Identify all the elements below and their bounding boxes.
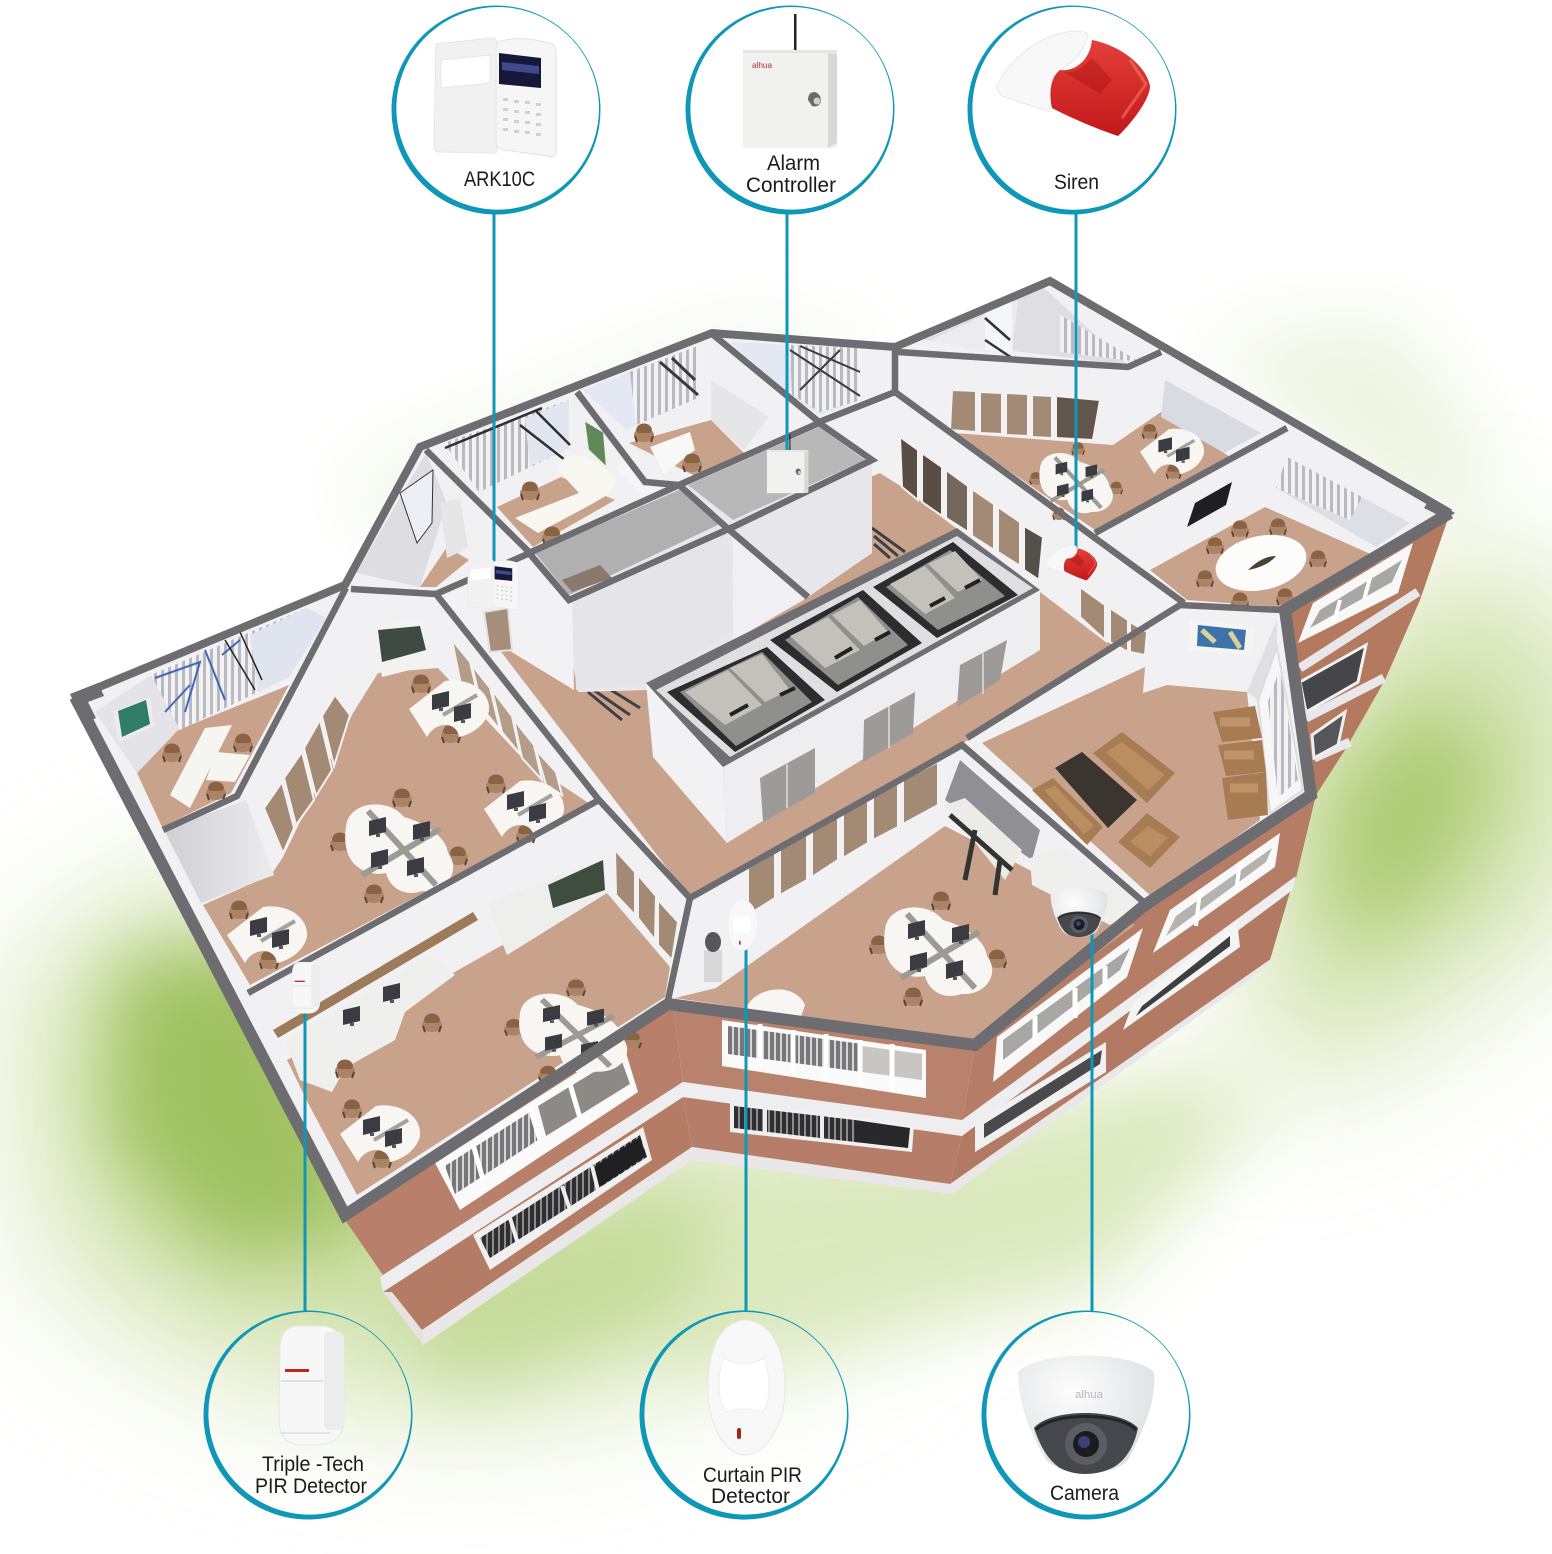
wall picture: reception [584,420,607,468]
device on plan: siren [1046,545,1097,581]
outer wall top: rear rim [75,281,1450,697]
icon: dome camera [1018,1356,1154,1474]
label: Curtain PIR Detector: Curtain PIR [703,1464,802,1487]
desk: lower left office front [340,1100,420,1168]
windows: front upper [722,1020,926,1098]
plotter equipment [945,798,1145,925]
roof: miniature floor 1 [667,647,825,752]
shade: left room back wall [95,675,180,773]
windows: front-right lower [975,1042,1106,1152]
callout: siren [968,5,1176,214]
icon: siren [996,31,1150,136]
building exterior facade [343,513,1450,1345]
blind: reception room [444,400,570,492]
shade: lounge side wall [1247,620,1277,700]
facade: right brick wall [1285,513,1450,795]
facade: white base band [422,958,1272,1345]
background: blurred lawn around the building [20,320,1552,1400]
facade: corner edge [383,1292,423,1345]
facade: lower front-left brick [383,1097,692,1330]
shelves: lower left office wall [273,912,478,1038]
windows: front-right far lower [1123,920,1240,1030]
block: roof rim [646,528,1040,767]
workstation cluster: lower centre office [869,892,1007,1006]
block: left wall [646,683,727,843]
device on plan: controller [767,434,808,493]
workstation cluster: open office [330,788,468,903]
windows: blinds on back walls [151,300,1410,813]
icon: ARK10C keypad [434,38,556,156]
connector: siren [1074,214,1078,548]
device on plan: camera [1051,887,1108,937]
device on plan: curtain detector [728,900,757,951]
stairs: right of core [872,528,905,558]
floor: reception room [497,477,615,547]
device on plan: keypad [467,560,519,610]
partition: open office right wall [452,640,562,795]
label: Alarm Controller: Controller [746,174,836,197]
label: Siren: Siren [1054,171,1099,194]
outer wall corner: right [1424,498,1455,530]
callout: ARK10C [392,5,600,214]
desk: open office lower [227,900,307,969]
block: roof inner [656,536,1033,757]
partition: upper corridor [900,437,1043,580]
furniture [113,380,1327,1168]
file room furniture [634,380,769,474]
ring: triple-tech PIR detector [204,1310,412,1520]
central roof block with miniature floors [646,528,1040,843]
floor: lower centre office [675,826,1135,1042]
desk: open office right [484,774,564,843]
floor plan: interior base [75,281,1450,1215]
label: Triple -Tech PIR Detector: PIR Detector [255,1475,367,1498]
desks: lower left office workbench [285,955,455,1092]
floor: central corridor [492,473,1150,898]
door: block left [760,748,815,822]
core: middle panel [733,533,804,640]
brand mark on controller: alhua [752,61,773,70]
glazed partitions along corridors [264,390,1147,960]
blind: meeting room [1276,457,1410,547]
floors: tan flooring in each room [137,412,1384,1195]
lounge sofas [1032,706,1268,868]
windows: front-left lower [473,1127,652,1270]
door seams [787,653,983,808]
windows: front-right upper [993,928,1143,1082]
cabinets: lower left office [487,860,607,955]
windows: front-right far upper [1153,833,1280,953]
desk: upper right office [1140,424,1204,479]
connector: camera [1090,930,1094,1312]
device on plan: triple-tech detector [292,962,320,1013]
floor: file room [629,420,744,477]
blind: stair room [730,342,861,415]
facade: upper front brick [673,1005,975,1122]
door: corridor left [484,608,512,652]
callout: curtain PIR detector [639,1310,849,1520]
partition: upper office glass [950,390,1100,440]
window: narrow left room [400,470,433,543]
wall-mounted screen [1187,482,1232,527]
block: front wall [723,590,1040,843]
label: Camera: Camera [1050,1482,1119,1505]
core: textured right room [688,427,865,520]
core: textured left room [535,490,722,595]
core: left pillar wall [436,553,574,690]
left room table and chairs [162,725,253,808]
windows: front-left upper [435,1043,638,1210]
windows: front lower [730,1102,914,1152]
callout: triple-tech PIR detector [204,1310,412,1520]
roof: miniature floor 2 [770,590,922,692]
outer wall top: front rim [75,513,1450,1215]
wall picture: lounge [1188,620,1254,655]
brand mark on camera: alhua [1075,1389,1104,1401]
blind: right office [1161,380,1261,453]
shade: corner panel open office [164,800,274,903]
roof: miniature floor 3 [873,542,1018,638]
icon: alarm controller box [743,14,837,148]
reception desk and chairs [515,455,654,545]
door: block right [957,640,1007,707]
door: block centre [863,692,915,762]
facade: white floor band [380,876,1296,1292]
floor: meeting room [1150,507,1384,607]
ring: camera [982,1310,1190,1520]
wall picture: left room [113,697,154,742]
label: ARK10C: ARK10C [464,168,535,191]
facade: lower front-right brick [950,892,1290,1186]
facade: upper front-right brick [962,795,1316,1122]
partition: lower centre back wall [748,762,938,915]
floor: open office room [203,668,590,985]
blind: closet right [1060,315,1140,362]
shade: plotter wall [945,760,1040,860]
cabinets: open office [374,620,430,677]
callout: alarm controller [686,5,894,214]
window: lounge side [1258,647,1303,813]
facade: upper front-left brick [343,1005,683,1275]
core: white wall mass [529,423,872,692]
ring: alarm controller [686,5,894,214]
desk: lower centre front [745,989,805,1020]
connector: alarm controller [786,214,788,452]
wall shading on side walls [95,287,1277,903]
water cooler [704,932,722,982]
central core: service rooms [436,423,872,692]
connector: triple-tech detector [304,1012,306,1312]
cabinet: narrow left room [440,498,468,558]
outer wall corner: left [70,683,104,724]
facade: lower front brick [683,1097,962,1186]
icon: curtain detector [708,1320,785,1455]
connector: ARK10C [492,214,496,566]
floor: left small room [137,685,289,827]
blind: left small room [151,608,326,730]
core: left panel [572,533,733,690]
label: Alarm Controller: Alarm [767,152,820,175]
shade: closet wall [924,287,1128,365]
stairs: left of central block [582,672,640,720]
floor: upper right office [954,412,1230,530]
icon: triple-tech detector [279,1326,344,1445]
connector: curtain detector [744,948,748,1312]
partition: lower left office [615,850,678,960]
workstation cluster: lower left office [504,979,642,1082]
interior wall tops [163,333,1287,1000]
callout: camera [982,1310,1190,1520]
meeting table with chairs [1196,518,1327,609]
core: right panel [736,463,872,597]
blind: upper closet [930,300,1018,358]
floor: lounge [982,667,1260,897]
floor: narrow left room [420,547,469,587]
label: Curtain PIR Detector: Detector [711,1485,790,1508]
ring: ARK10C [392,5,600,214]
workstation cluster: upper office [1029,442,1123,520]
floor: lower left office [287,893,670,1195]
ring: siren [968,5,1176,214]
partition: upper corridor right [1080,587,1147,655]
facade: right wall white bands [1300,592,1418,758]
desk: open office top [409,674,489,743]
blind: file room [583,345,700,430]
core: left room floor [562,565,612,592]
windows: right wall [1298,543,1413,758]
ring: curtain PIR detector [639,1310,849,1520]
shade: narrow room wall [356,453,447,587]
connector lines [305,214,1092,1312]
devices placed on the building [292,434,1108,1013]
label: Triple -Tech PIR Detector: Triple -Tech [262,1453,364,1476]
partition: open office left wall [264,695,350,853]
